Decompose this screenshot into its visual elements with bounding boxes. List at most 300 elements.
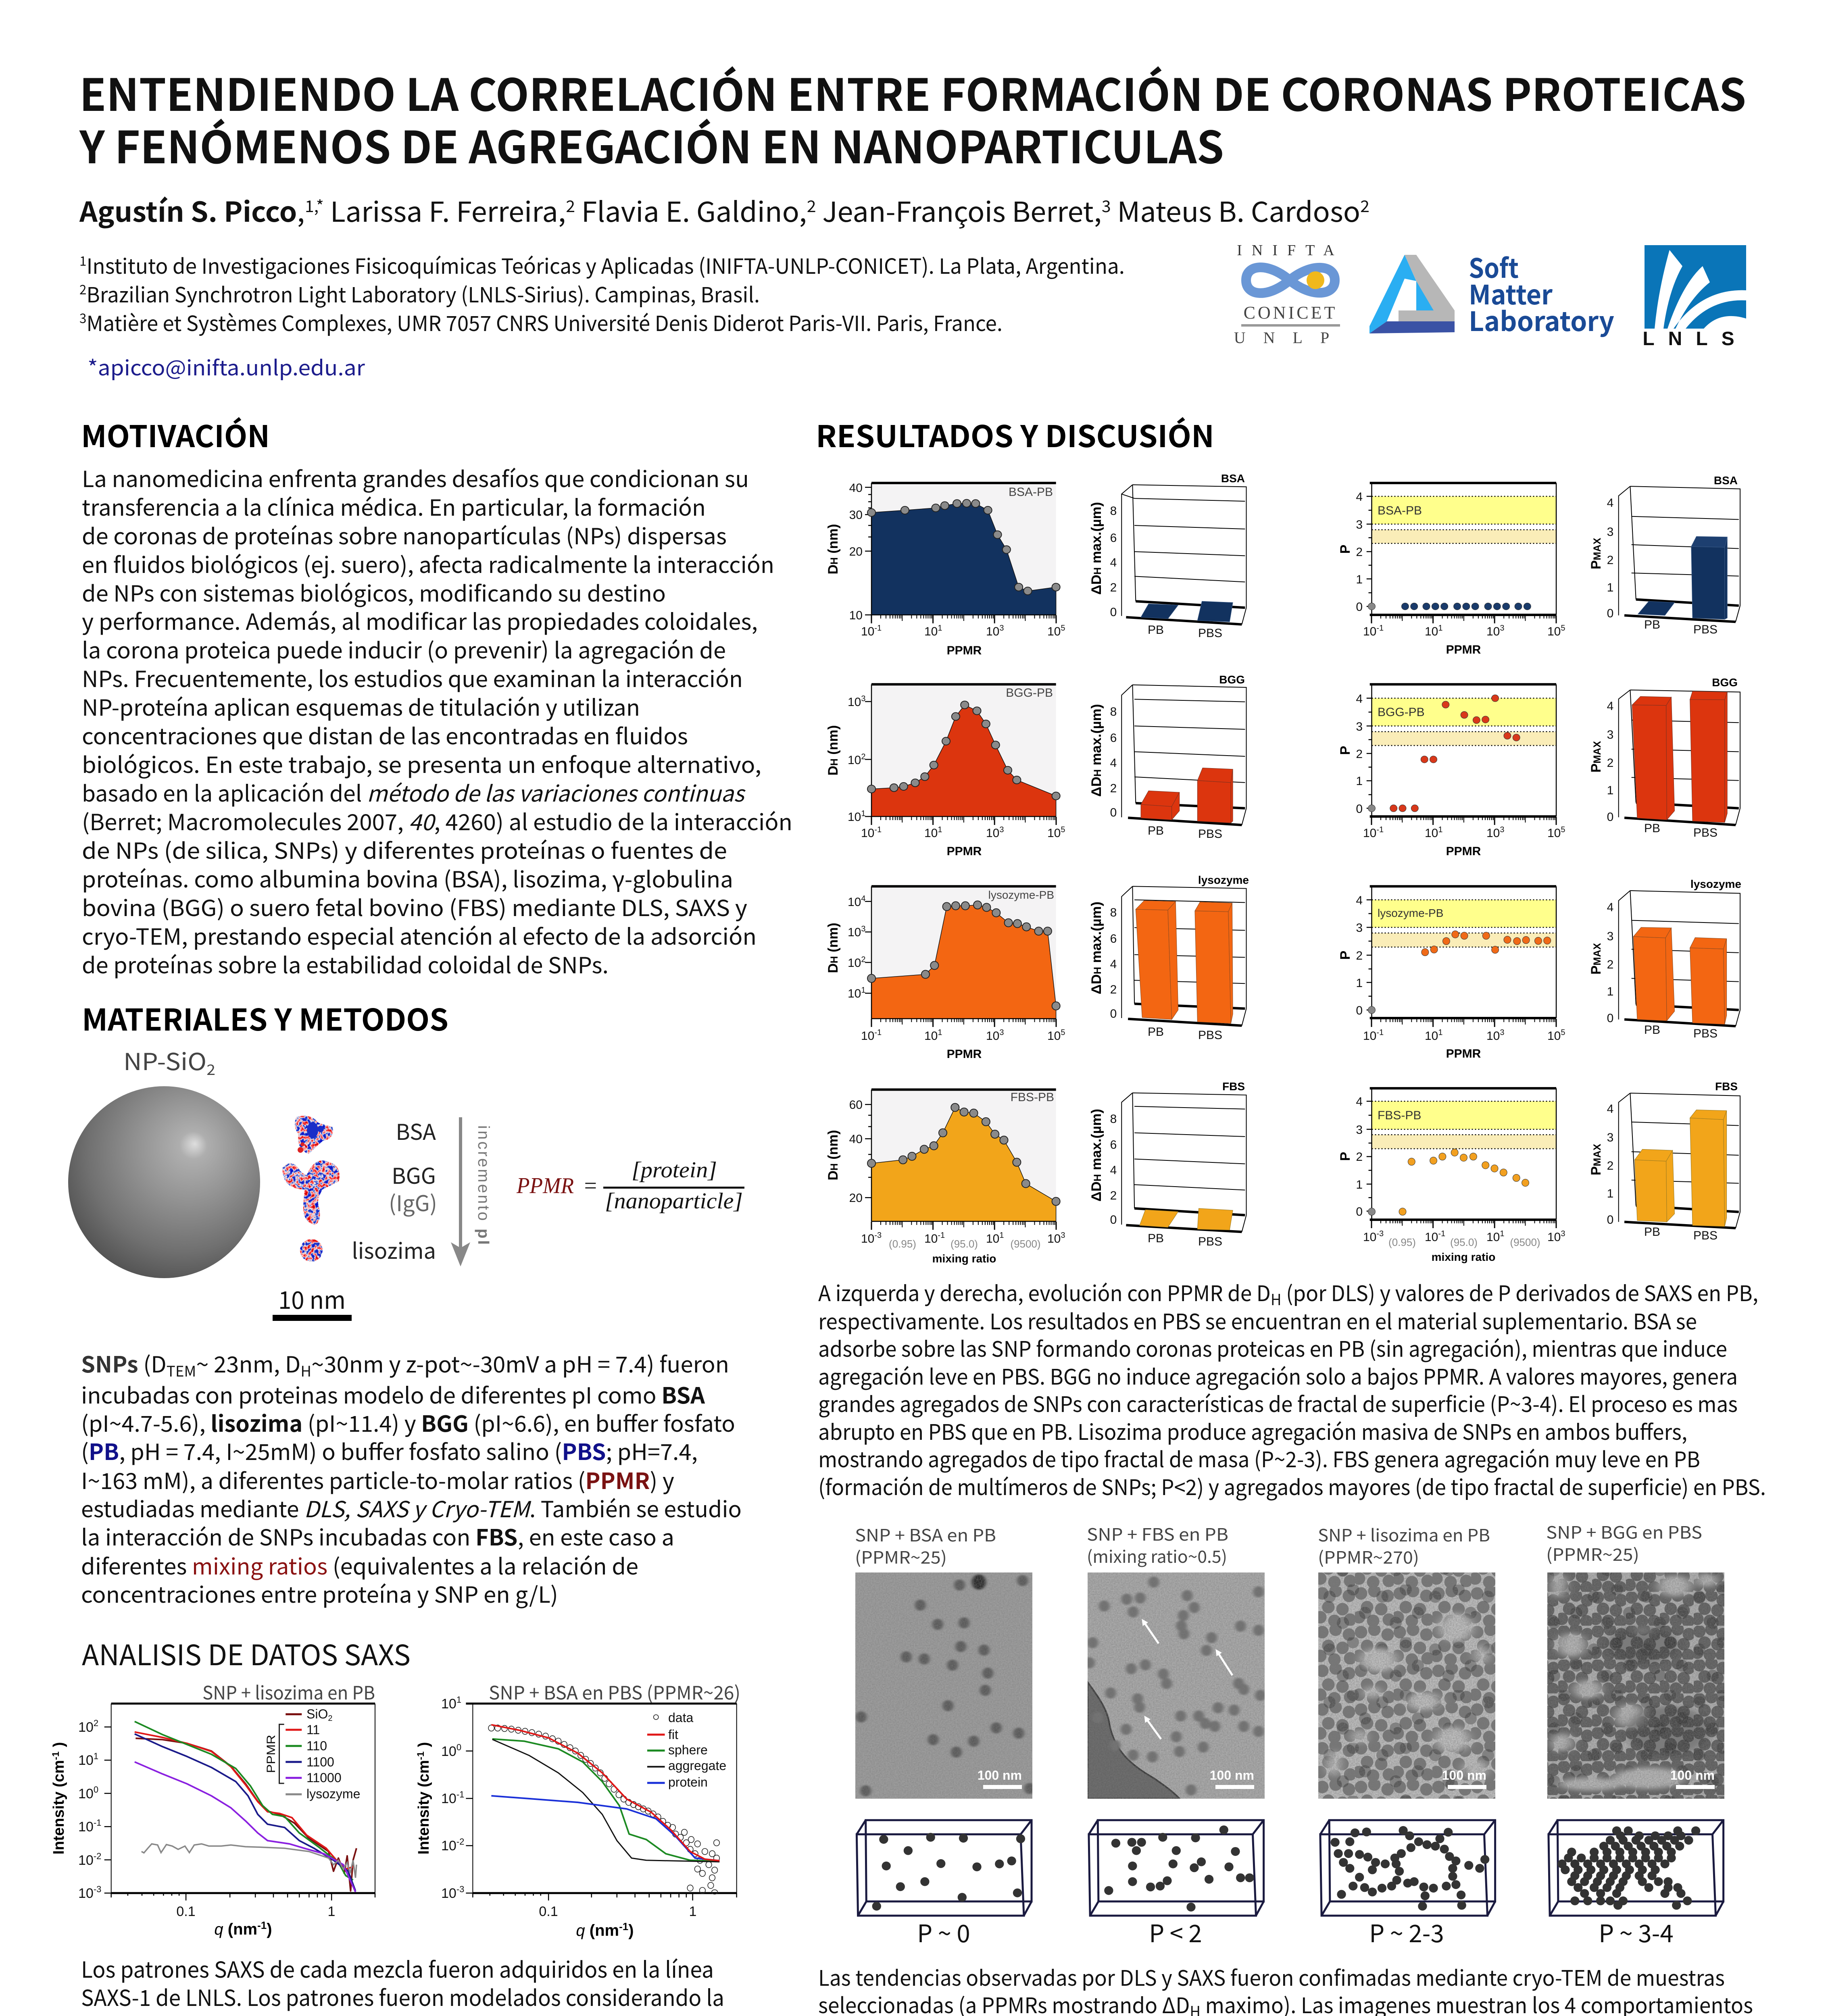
- chart: BSA DH vs PPMR: DH (nm): [825, 524, 841, 575]
- chart: BGG DH vs PPMR: 1: [861, 809, 865, 818]
- authors: Mateus B. Cardoso: [1111, 190, 1360, 230]
- chart: BSA P vs PPMR: 2: [1356, 546, 1363, 559]
- chart: FBS DH vs mixing ratio: [825, 1089, 1065, 1265]
- text block: motivación: de NPs con sistemas biológicos, modificando su destino: [82, 576, 666, 608]
- TEM image: SNP + BGG: [1547, 1572, 1724, 1799]
- TEM image: SNP + lisozima: 100 nm: [1442, 1768, 1486, 1783]
- schematic box: P ~ 3-4: [1549, 1820, 1724, 1916]
- TEM captions: SNP + FBS en PB: [1087, 1521, 1228, 1546]
- chart: BGG DH vs PPMR: 10: [986, 827, 999, 840]
- chart: SAXS BSA en PBS: 10: [441, 1791, 456, 1806]
- chart: lysozyme delta DH bars: PBS: [1198, 1029, 1222, 1042]
- chart: FBS Pmax bars: PMAX: [1588, 1144, 1604, 1175]
- chart: BSA DH vs PPMR: 10: [924, 625, 938, 638]
- chart: BSA delta DH bars: [1089, 472, 1246, 640]
- chart: BGG DH vs PPMR: 10: [848, 810, 861, 824]
- chart: lysozyme delta DH bars: 2: [1110, 983, 1117, 996]
- heading: resultados y discusión: RESULTADOS Y DISCUSIÓN: [816, 413, 1214, 456]
- heading: materiales y metodos: MATERIALES Y METODOS: [82, 996, 448, 1039]
- chart: FBS Pmax bars: 0: [1607, 1213, 1613, 1227]
- protein labels: BSA: [396, 1114, 436, 1146]
- chart: BSA P vs PPMR: 1: [1438, 624, 1443, 633]
- text block: results discussion: agregación leve en PBS. BGG no induce agregación solo a bajos PPMR. A valores mayores, genera: [818, 1360, 1738, 1391]
- chart: lysozyme delta DH bars: lysozyme: [1198, 874, 1249, 886]
- chart: FBS delta DH bars: 4: [1110, 1164, 1117, 1177]
- chart: BSA DH vs PPMR: -1: [874, 624, 882, 633]
- P value labels: [917, 1914, 1674, 1949]
- chart: BGG P vs PPMR: 1: [1356, 775, 1363, 788]
- chart: BSA P vs PPMR: [1338, 483, 1565, 656]
- chart: SAXS BSA en PBS: sphere: [668, 1743, 708, 1757]
- text block: SNPs methods: ~30nm y z-pot~-30mV a pH = 7.4) fueron: [311, 1347, 729, 1379]
- chart: SAXS BSA en PBS: 1: [456, 1695, 461, 1705]
- chart: lysozyme P vs PPMR: 1: [1438, 1028, 1443, 1037]
- chart: lysozyme P vs PPMR: 3: [1356, 921, 1363, 935]
- heading: motivación: MOTIVACIÓN: [81, 413, 270, 456]
- affiliations: [79, 250, 1125, 337]
- authors: 2: [566, 194, 575, 217]
- formula: PPMR: =: [583, 1173, 598, 1198]
- label: NP-SiO2: 2: [206, 1058, 215, 1079]
- text block: motivación: [82, 461, 792, 980]
- chart: BSA delta DH bars: 2: [1110, 581, 1117, 594]
- chart: FBS P vs mixing ratio: -1: [1438, 1229, 1445, 1238]
- chart: BGG DH vs PPMR: 3: [999, 825, 1004, 834]
- chart: FBS P vs mixing ratio: 10: [1425, 1231, 1438, 1244]
- authors: 3: [1102, 194, 1111, 217]
- chart: BSA P vs PPMR: -1: [1376, 624, 1384, 633]
- logo: LNLS: LNLS: [1642, 328, 1748, 350]
- chart: lysozyme P vs PPMR: lysozyme-PB: [1378, 907, 1443, 919]
- TEM image: SNP + BGG: 100 nm: [1670, 1768, 1715, 1783]
- chart: FBS P vs mixing ratio: 2: [1356, 1150, 1363, 1164]
- chart: BSA DH vs PPMR: 10: [849, 609, 863, 622]
- TEM captions: (PPMR~270): [1318, 1544, 1419, 1569]
- chart: BSA delta DH bars: BSA: [1221, 472, 1245, 485]
- chart: BGG delta DH bars: PB: [1148, 824, 1164, 837]
- chart: FBS delta DH bars: PBS: [1198, 1235, 1222, 1248]
- chart: FBS delta DH bars: 8: [1110, 1112, 1117, 1126]
- chart: FBS P vs mixing ratio: [1338, 1088, 1565, 1263]
- chart: FBS delta DH bars: ΔDH max.(µm): [1089, 1109, 1104, 1202]
- chart: BSA DH vs PPMR: BSA-PB: [1009, 485, 1053, 499]
- chart: SAXS lisozima en PB: 110: [306, 1739, 327, 1753]
- chart: BGG Pmax bars: 2: [1607, 756, 1613, 770]
- TEM captions: (PPMR~25): [1546, 1541, 1639, 1566]
- chart: lysozyme Pmax bars: 1: [1607, 985, 1613, 998]
- chart: BGG Pmax bars: PB: [1644, 822, 1660, 835]
- chart: BSA Pmax bars: 4: [1607, 496, 1613, 510]
- logo: INIFTA CONICET UNLP: CONICET: [1244, 303, 1337, 323]
- logo: Soft Matter Laboratory: [1369, 247, 1614, 339]
- chart: lysozyme DH vs PPMR: 10: [1047, 1029, 1061, 1043]
- chart: lysozyme P vs PPMR: P: [1338, 951, 1353, 960]
- chart: BGG P vs PPMR: 0: [1356, 802, 1363, 816]
- chart: BSA delta DH bars: 4: [1110, 556, 1117, 569]
- affiliations: Brazilian Synchrotron Light Laboratory (LNLS-Sirius). Campinas, Brasil.: [86, 278, 760, 308]
- text block: motivación: proteínas. como albumina bovina (BSA), lisozima, γ-globulina: [82, 862, 733, 894]
- chart: SAXS lisozima en PB: 10: [78, 1886, 94, 1901]
- chart: BSA DH vs PPMR: 20: [849, 545, 863, 558]
- chart: FBS DH vs mixing ratio: 40: [849, 1133, 863, 1146]
- chart: SAXS BSA en PBS: 10: [441, 1744, 456, 1759]
- affiliations: 3: [79, 308, 86, 327]
- chart: BGG DH vs PPMR: DH (nm): [825, 725, 841, 776]
- chart: SAXS BSA en PBS: -2: [456, 1837, 464, 1847]
- chart: BGG DH vs PPMR: 10: [848, 696, 861, 709]
- chart: BSA delta DH bars: 6: [1110, 531, 1117, 545]
- chart: BSA P vs PPMR: 10: [1425, 625, 1438, 638]
- chart: SAXS lisozima en PB: [50, 1679, 375, 1938]
- chart: BSA Pmax bars: 3: [1607, 525, 1613, 539]
- chart: lysozyme DH vs PPMR: 4: [861, 894, 865, 903]
- chart: FBS P vs mixing ratio: -3: [1376, 1229, 1384, 1238]
- chart: SAXS BSA en PBS: aggregate: [668, 1758, 726, 1773]
- TEM image: SNP + BSA: [855, 1572, 1035, 1799]
- text block: SNPs methods: TEM: [167, 1360, 196, 1381]
- title: [79, 59, 1746, 176]
- logo: Soft Matter Laboratory: Laboratory: [1469, 300, 1614, 339]
- chart: FBS DH vs mixing ratio: -1: [938, 1231, 945, 1240]
- chart: SAXS lisozima en PB: 11: [306, 1722, 320, 1737]
- chart: FBS Pmax bars: 1: [1607, 1187, 1613, 1200]
- chart: BSA DH vs PPMR: 30: [849, 508, 863, 522]
- chart: FBS P vs mixing ratio: 10: [1486, 1231, 1500, 1244]
- chart: FBS P vs mixing ratio: P: [1338, 1152, 1353, 1161]
- chart: lysozyme P vs PPMR: 1: [1356, 977, 1363, 990]
- chart: BGG DH vs PPMR: BGG-PB: [1006, 686, 1053, 700]
- chart: FBS P vs mixing ratio: 1: [1356, 1178, 1363, 1191]
- chart: lysozyme DH vs PPMR: 10: [848, 987, 861, 1000]
- chart: SAXS lisozima en PB: -1: [94, 1818, 101, 1828]
- chart: BSA P vs PPMR: P: [1338, 545, 1353, 554]
- chart: FBS DH vs mixing ratio: FBS-PB: [1011, 1091, 1054, 1104]
- chart: lysozyme P vs PPMR: 10: [1547, 1029, 1561, 1043]
- chart: BSA P vs PPMR: 3: [1356, 518, 1363, 531]
- chart: SAXS lisozima en PB: PPMR: [265, 1735, 278, 1773]
- text block: motivación: de NPs (de silica, SNPs) y diferentes proteínas o fuentes de: [82, 833, 727, 865]
- chart: BGG Pmax bars: [1588, 676, 1740, 839]
- authors: 1,*: [305, 194, 324, 217]
- text block: SNPs methods: SNPs (D: [81, 1347, 166, 1379]
- chart: FBS P vs mixing ratio: 3: [1356, 1123, 1363, 1137]
- authors: Larissa F. Ferreira,: [324, 190, 566, 230]
- chart: lysozyme delta DH bars: 0: [1110, 1007, 1117, 1020]
- chart: SAXS BSA en PBS: data: [668, 1710, 693, 1725]
- chart: BGG P vs PPMR: 10: [1363, 827, 1376, 840]
- text block: motivación: de coronas de proteínas sobre nanopartículas (NPs) dispersas: [82, 519, 727, 551]
- chart: BGG DH vs PPMR: 10: [861, 827, 874, 840]
- chart: FBS P vs mixing ratio: (9500): [1510, 1236, 1540, 1248]
- chart: SAXS lisozima en PB: 10: [78, 1819, 94, 1835]
- chart: FBS delta DH bars: [1089, 1080, 1246, 1248]
- affiliations: Matière et Systèmes Complexes, UMR 7057 CNRS Université Denis Diderot Paris-VII. Paris, France.: [86, 307, 1003, 337]
- logo: INIFTA CONICET UNLP: [1234, 242, 1347, 347]
- chart: SAXS lisozima en PB: SiO: [306, 1707, 328, 1721]
- protein labels: BGG: [392, 1158, 436, 1190]
- chart: SAXS BSA en PBS: -1: [415, 1752, 426, 1760]
- chart: BGG P vs PPMR: -1: [1376, 825, 1384, 834]
- protein labels: [352, 1114, 437, 1265]
- chart: BGG Pmax bars: 3: [1607, 728, 1613, 741]
- chart: SAXS BSA en PBS: q (nm: [576, 1922, 619, 1939]
- text block: motivación: NP-proteína aplican esquemas de titulación y utilizan: [82, 690, 640, 722]
- chart: BGG DH vs PPMR: 10: [1047, 827, 1061, 840]
- illustration: BGG (IgG) protein: [282, 1160, 340, 1225]
- chart: lysozyme DH vs PPMR: 1: [938, 1028, 942, 1037]
- chart: BSA delta DH bars: 8: [1110, 504, 1117, 518]
- chart: BSA DH vs PPMR: 5: [1061, 624, 1065, 633]
- chart: BGG P vs PPMR: 5: [1561, 825, 1565, 834]
- chart: FBS DH vs mixing ratio: mixing ratio: [932, 1252, 996, 1265]
- chart: FBS DH vs mixing ratio: (95.0): [950, 1238, 978, 1250]
- chart: lysozyme delta DH bars: ΔDH max.(µm): [1089, 902, 1104, 994]
- text block: SAXS description: [81, 1952, 724, 2016]
- chart: SAXS BSA en PBS: SNP + BSA en PBS (PPMR~26): [489, 1679, 740, 1705]
- text block: motivación: en fluidos biológicos (ej. suero), afecta radicalmente la interacción: [82, 547, 774, 579]
- chart: FBS DH vs mixing ratio: 10: [861, 1232, 874, 1245]
- chart: SAXS lisozima en PB: 2: [94, 1718, 98, 1728]
- chart: lysozyme Pmax bars: 0: [1607, 1012, 1613, 1025]
- chart: lysozyme Pmax bars: 4: [1607, 901, 1613, 914]
- chart: FBS DH vs mixing ratio: 3: [1061, 1231, 1065, 1240]
- chart: SAXS lisozima en PB: -1: [257, 1919, 267, 1931]
- chart: lysozyme DH vs PPMR: -1: [874, 1028, 882, 1037]
- chart: lysozyme P vs PPMR: PPMR: [1446, 1047, 1481, 1060]
- chart: BSA P vs PPMR: 5: [1561, 624, 1565, 633]
- chart: lysozyme DH vs PPMR: 10: [848, 896, 861, 909]
- chart: SAXS BSA en PBS: protein: [668, 1775, 708, 1789]
- text block: SNPs methods: incubadas con proteinas modelo de diferentes pI como BSA: [81, 1378, 705, 1410]
- formula: PPMR: PPMR: [516, 1173, 574, 1198]
- chart: lysozyme Pmax bars: lysozyme: [1690, 878, 1741, 890]
- chart: FBS DH vs mixing ratio: 20: [849, 1191, 863, 1205]
- chart: FBS P vs mixing ratio: FBS-PB: [1378, 1109, 1421, 1122]
- chart: BSA P vs PPMR: 10: [1547, 625, 1561, 638]
- text block: SNPs methods: diferentes mixing ratios (equivalentes a la relación de: [81, 1549, 638, 1581]
- schematic box: P < 2: [1089, 1820, 1264, 1916]
- text block: cryo-TEM discussion: [818, 1962, 1782, 2016]
- chart: SAXS BSA en PBS: Intensity (cm: [415, 1760, 432, 1855]
- chart: SAXS lisozima en PB: 1: [328, 1904, 335, 1919]
- chart: lysozyme DH vs PPMR: 10: [861, 1029, 874, 1043]
- chart: lysozyme DH vs PPMR: 10: [924, 1029, 938, 1043]
- text block: motivación: concentraciones que distan de las encontradas en fluidos: [82, 719, 688, 751]
- authors: Agustín S. Picco,: [79, 190, 304, 230]
- text block: motivación: basado en la aplicación del método de las variaciones continuas: [82, 776, 746, 808]
- logo: LNLS: [1642, 245, 1748, 350]
- chart: FBS delta DH bars: 6: [1110, 1138, 1117, 1152]
- chart: BGG delta DH bars: 4: [1110, 756, 1117, 770]
- chart: BSA DH vs PPMR: 40: [849, 481, 863, 495]
- chart: BSA Pmax bars: BSA: [1714, 474, 1738, 487]
- text block: SNPs methods: la interacción de SNPs incubadas con FBS, en este caso a: [81, 1520, 674, 1552]
- chart: SAXS BSA en PBS: 0.1: [539, 1904, 558, 1919]
- chart: FBS P vs mixing ratio: (95.0): [1450, 1236, 1478, 1248]
- chart: lysozyme DH vs PPMR: DH (nm): [825, 923, 841, 973]
- chart: lysozyme Pmax bars: 3: [1607, 930, 1613, 943]
- text block: SNPs methods: H: [300, 1360, 311, 1381]
- chart: lysozyme Pmax bars: [1588, 878, 1741, 1040]
- chart: BSA P vs PPMR: PPMR: [1446, 643, 1481, 656]
- chart: BGG Pmax bars: 4: [1607, 700, 1613, 713]
- chart: FBS P vs mixing ratio: 0: [1356, 1205, 1363, 1218]
- chart: lysozyme delta DH bars: 8: [1110, 906, 1117, 919]
- illustration: silica sphere: [68, 1086, 260, 1278]
- chart: lysozyme DH vs PPMR: lysozyme-PB: [988, 889, 1054, 901]
- text block: results discussion: A izquerda y derecha, evolución con PPMR de D: [818, 1277, 1286, 1308]
- chart: SAXS lisozima en PB: ): [50, 1742, 67, 1752]
- chart: BGG P vs PPMR: BGG-PB: [1378, 706, 1425, 719]
- chart: lysozyme DH vs PPMR: 10: [848, 956, 861, 970]
- chart: SAXS lisozima en PB: q (nm: [214, 1920, 257, 1938]
- chart: SAXS BSA en PBS: -1: [456, 1789, 464, 1799]
- TEM image: SNP + FBS: 100 nm: [1210, 1768, 1254, 1783]
- chart: lysozyme DH vs PPMR: 2: [861, 955, 865, 964]
- chart: BGG delta DH bars: PBS: [1198, 827, 1222, 841]
- text block: results discussion: respectivamente. Los resultados en PBS se encuentran en el material suplementario. BSA se: [818, 1305, 1697, 1336]
- chart: lysozyme P vs PPMR: [1338, 886, 1565, 1060]
- chart: BSA delta DH bars: 0: [1110, 606, 1117, 619]
- P value labels: P ~ 2-3: [1369, 1914, 1444, 1949]
- chart: SAXS lisozima en PB: 11000: [306, 1770, 342, 1785]
- chart: SAXS lisozima en PB: -1: [50, 1752, 61, 1760]
- chart: BGG delta DH bars: 0: [1110, 806, 1117, 819]
- chart: lysozyme DH vs PPMR: 3: [861, 925, 865, 933]
- chart: FBS DH vs mixing ratio: 1: [999, 1231, 1004, 1240]
- chart: BGG P vs PPMR: P: [1338, 746, 1353, 755]
- text block: cryo-TEM discussion: Las tendencias observadas por DLS y SAXS fueron confimadas mediante cryo-TEM de muestras: [818, 1962, 1725, 1992]
- chart: BGG Pmax bars: PMAX: [1588, 741, 1604, 773]
- title: ENTENDIENDO LA CORRELACIÓN ENTRE FORMACIÓN DE CORONAS PROTEICAS: [79, 59, 1746, 124]
- chart: BSA P vs PPMR: 10: [1486, 625, 1500, 638]
- chart: FBS Pmax bars: FBS: [1715, 1080, 1738, 1093]
- text block: motivación: la corona proteica puede inducir (o prevenir) la agregación de: [82, 633, 726, 665]
- chart: BGG delta DH bars: 6: [1110, 731, 1117, 745]
- text block: motivación: (Berret; Macromolecules 2007, 40, 4260) al estudio de la interacción: [82, 804, 792, 837]
- logo: INIFTA CONICET UNLP: UNLP: [1234, 329, 1347, 347]
- chart: lysozyme delta DH bars: 4: [1110, 958, 1117, 971]
- chart: SAXS lisozima en PB: 0.1: [176, 1904, 196, 1919]
- chart: SAXS lisozima en PB: ): [267, 1920, 272, 1938]
- label: NP-SiO2: NP-SiO: [123, 1043, 200, 1077]
- chart: BGG delta DH bars: [1089, 673, 1246, 841]
- text block: SAXS description: Los patrones SAXS de cada mezcla fueron adquiridos en la línea: [81, 1952, 714, 1984]
- chart: lysozyme Pmax bars: PBS: [1693, 1027, 1718, 1040]
- chart: SAXS BSA en PBS: 10: [441, 1838, 456, 1854]
- chart: BGG delta DH bars: ΔDH max.(µm): [1089, 704, 1104, 797]
- chart: SAXS lisozima en PB: 10: [78, 1720, 94, 1735]
- chart: SAXS BSA en PBS: 10: [441, 1886, 456, 1901]
- chart: lysozyme P vs PPMR: 10: [1363, 1029, 1376, 1043]
- chart: BSA delta DH bars: PBS: [1198, 627, 1222, 640]
- chart: FBS Pmax bars: 2: [1607, 1159, 1613, 1173]
- chart: SAXS lisozima en PB: 10: [78, 1853, 94, 1868]
- text block: motivación: y performance. Además, al modificar las propiedades coloidales,: [82, 604, 758, 636]
- text block: SNPs methods: I~163 mM), a diferentes particle-to-molar ratios ( PPMR) y: [81, 1463, 674, 1495]
- chart: SAXS lisozima en PB: SNP + lisozima en PB: [202, 1679, 375, 1705]
- chart: SAXS lisozima en PB: 2: [328, 1714, 332, 1723]
- chart: SAXS BSA en PBS: [415, 1679, 740, 1939]
- chart: lysozyme P vs PPMR: 10: [1486, 1029, 1500, 1043]
- TEM captions: SNP + BGG en PBS: [1546, 1519, 1702, 1544]
- chart: BGG P vs PPMR: [1338, 684, 1565, 858]
- chart: FBS P vs mixing ratio: mixing ratio: [1432, 1251, 1495, 1263]
- affiliations: 1: [79, 251, 86, 270]
- chart: SAXS BSA en PBS: 1: [689, 1904, 696, 1919]
- chart: BSA delta DH bars: PB: [1148, 623, 1164, 637]
- text block: SNPs methods: (PB, pH = 7.4, I~25mM) o buffer fosfato salino ( PBS; pH=7.4,: [81, 1434, 698, 1466]
- chart: lysozyme P vs PPMR: -1: [1376, 1028, 1384, 1037]
- text block: results discussion: (por DLS) y valores de P derivados de SAXS en PB,: [1282, 1277, 1758, 1308]
- text block: motivación: biológicos. En este trabajo, se presenta un enfoque alternativo,: [82, 747, 761, 779]
- chart: BSA DH vs PPMR: [825, 481, 1065, 657]
- chart: BSA delta DH bars: ΔDH max.(µm): [1089, 502, 1104, 595]
- chart: lysozyme DH vs PPMR: PPMR: [947, 1048, 982, 1061]
- chart: BSA DH vs PPMR: PPMR: [947, 644, 982, 657]
- chart: BGG delta DH bars: BGG: [1219, 673, 1245, 686]
- chart: BGG DH vs PPMR: [825, 684, 1065, 858]
- chart: BSA DH vs PPMR: 10: [986, 625, 999, 638]
- email: *apicco@inifta.unlp.edu.ar: [88, 351, 365, 381]
- chart: BGG Pmax bars: BGG: [1712, 676, 1738, 689]
- chart: BSA Pmax bars: [1588, 474, 1740, 636]
- text block: results discussion: H: [1271, 1287, 1282, 1310]
- chart: FBS DH vs mixing ratio: 60: [849, 1098, 863, 1112]
- chart: FBS P vs mixing ratio: (0.95): [1388, 1236, 1416, 1248]
- text block: results discussion: mostrando agregados de tipo fractal de masa (P~2-3). FBS genera agregación muy leve en PB: [818, 1443, 1700, 1474]
- text block: results discussion: [818, 1277, 1766, 1502]
- chart: FBS DH vs mixing ratio: -3: [874, 1231, 882, 1240]
- text block: results discussion: abrupto en PBS que en PB. Lisozima produce agregación masiva de SNPs en ambos buffers,: [818, 1416, 1687, 1446]
- chart: FBS Pmax bars: PB: [1644, 1225, 1660, 1239]
- chart: BGG P vs PPMR: 10: [1425, 827, 1438, 840]
- chart: SAXS BSA en PBS: -1: [619, 1920, 628, 1933]
- affiliations: Instituto de Investigaciones Fisicoquímicas Teóricas y Aplicadas (INIFTA-UNLP-CONICET). La Plata, Argentina.: [86, 250, 1125, 280]
- chart: FBS Pmax bars: [1588, 1080, 1740, 1242]
- TEM image: SNP + BSA: 100 nm: [978, 1768, 1022, 1783]
- chart: BGG P vs PPMR: 3: [1500, 825, 1504, 834]
- chart: FBS P vs mixing ratio: 4: [1356, 1095, 1363, 1108]
- chart: BSA DH vs PPMR: 1: [938, 624, 942, 633]
- chart: FBS delta DH bars: 2: [1110, 1189, 1117, 1202]
- chart: BGG Pmax bars: PBS: [1693, 826, 1718, 839]
- chart: FBS P vs mixing ratio: 10: [1547, 1231, 1561, 1244]
- text block: motivación: transferencia a la clínica médica. En particular, la formación: [82, 490, 706, 522]
- chart: lysozyme DH vs PPMR: 1: [861, 986, 865, 995]
- TEM image: SNP + FBS: [1084, 1572, 1266, 1799]
- chart: SAXS BSA en PBS: 10: [441, 1696, 456, 1712]
- chart: lysozyme delta DH bars: PB: [1148, 1025, 1164, 1039]
- chart: FBS P vs mixing ratio: 3: [1561, 1229, 1565, 1238]
- chart: FBS Pmax bars: PBS: [1693, 1229, 1718, 1242]
- chart: BGG DH vs PPMR: 10: [924, 827, 938, 840]
- chart: BGG Pmax bars: 1: [1607, 784, 1613, 797]
- text block: results discussion: grandes agregados de SNPs con características de fractal de superficie (P~3-4). El proceso es mas: [818, 1388, 1738, 1418]
- chart: BGG P vs PPMR: 1: [1438, 825, 1443, 834]
- chart: SAXS BSA en PBS: ): [415, 1742, 432, 1752]
- chart: lysozyme Pmax bars: PB: [1644, 1023, 1660, 1037]
- chart: SAXS lisozima en PB: 1100: [306, 1755, 334, 1769]
- chart: lysozyme delta DH bars: 6: [1110, 932, 1117, 946]
- chart: SAXS lisozima en PB: -3: [94, 1884, 101, 1894]
- chart: FBS delta DH bars: FBS: [1222, 1080, 1245, 1093]
- chart: BGG Pmax bars: 0: [1607, 810, 1613, 824]
- TEM captions: (mixing ratio~0.5): [1087, 1543, 1227, 1568]
- chart: BGG DH vs PPMR: PPMR: [947, 845, 982, 858]
- chart: lysozyme delta DH bars: [1089, 874, 1249, 1042]
- text block: SAXS description: SAXS-1 de LNLS. Los patrones fueron modelados considerando la: [81, 1980, 724, 2012]
